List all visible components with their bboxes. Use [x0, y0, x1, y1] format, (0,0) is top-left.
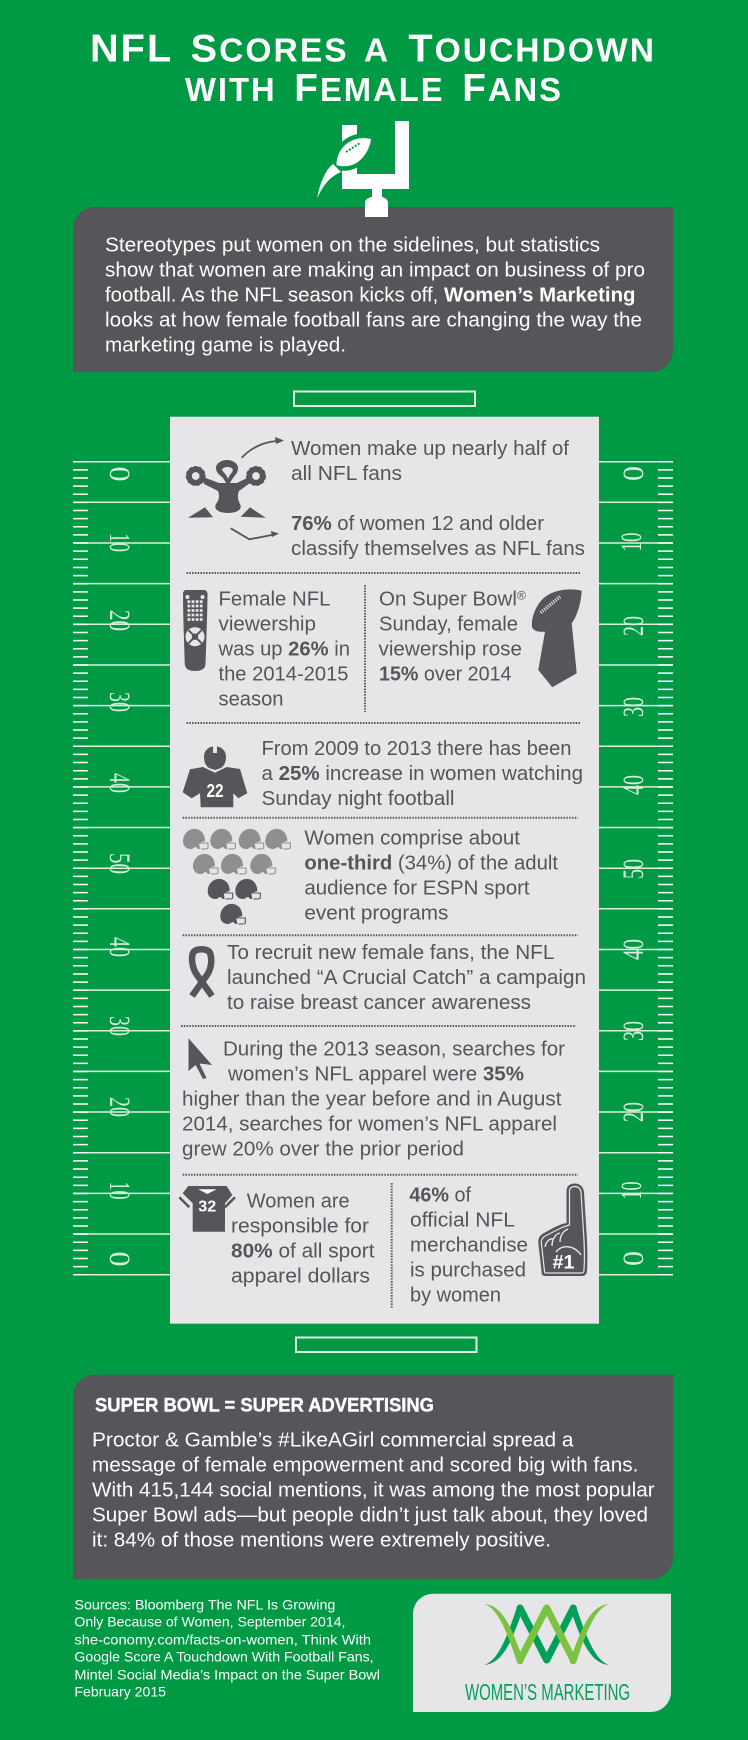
logo wordmark: WOMEN’S MARKETING [465, 1679, 630, 1705]
icon: football player 22 [183, 746, 247, 807]
yard numbers: left: 30 [103, 1016, 136, 1036]
text block: viewership up 26 percent: was up 26% in [217, 639, 350, 661]
text block: sources: Sources: Bloomberg The NFL Is Growing [74, 1596, 335, 1612]
text block: Sunday night football: Sunday night football [262, 788, 454, 810]
icon: foam finger #1 [538, 1184, 587, 1276]
text block: LikeAGirl commercial: Super Bowl ads—but people didn’t just talk about, they loved [92, 1505, 648, 1527]
text block: intro: looks at how female football fans are changing the way the [105, 310, 642, 332]
text block: 46 percent merchandise: 46% of [409, 1185, 471, 1207]
text block: Crucial Catch: to raise breast cancer awareness [227, 992, 531, 1014]
dotted dividers [181, 573, 581, 1308]
text block: Super Bowl viewership: ® [517, 589, 526, 603]
panel: Women's Marketing logo [413, 1594, 671, 1712]
text block: viewership up 26 percent: Female NFL [218, 589, 330, 611]
yard numbers: left: 30 [103, 692, 136, 712]
heading: Super Bowl = Super Advertising: SUPER BOWL = SUPER ADVERTISING [95, 1395, 434, 1416]
yard numbers: right: 40 [617, 939, 650, 960]
yard numbers: right: 30 [617, 1021, 650, 1041]
text block: intro [105, 235, 645, 357]
text block: 46 percent merchandise [409, 1185, 528, 1307]
text block: viewership up 26 percent: season [218, 689, 284, 711]
text block: nearly half of fans: all NFL fans [291, 463, 402, 485]
text block: viewership up 26 percent: viewership [218, 614, 316, 636]
icon: awareness ribbon [192, 949, 212, 996]
text block: ESPN audience: one-third (34%) of the adult [304, 852, 558, 874]
text block: LikeAGirl commercial [92, 1430, 655, 1552]
text block: Crucial Catch: launched “A Crucial Catch” a campaign [227, 967, 586, 989]
yard numbers: right: 0 [617, 1251, 650, 1266]
text block: apparel searches: 2014, searches for women’s NFL apparel [182, 1114, 557, 1136]
text block: sources: Google Score A Touchdown With Football Fans, [74, 1649, 374, 1665]
text block: Sunday night football: a 25% increase in women watching [262, 763, 583, 785]
icon: goal post and football [317, 121, 409, 217]
yard numbers: left: 20 [103, 1097, 136, 1117]
text block: intro: Stereotypes put women on the sidelines, but statistics [105, 235, 600, 257]
icon: cheerleader with arrows [187, 437, 284, 539]
yard numbers: right: 0 [617, 466, 650, 481]
text block: sources: February 2015 [74, 1684, 166, 1700]
text block: Sunday night football [262, 738, 583, 810]
yard numbers: left: 10 [103, 1182, 136, 1200]
yard numbers: left [103, 466, 136, 1266]
text block: Crucial Catch [227, 942, 586, 1014]
text block: LikeAGirl commercial: it: 84% of those mentions were extremely positive. [92, 1530, 551, 1552]
icon: foam finger #1: #1 [552, 1252, 575, 1274]
text block: Super Bowl viewership: Sunday, female [379, 614, 518, 636]
text block: intro: marketing game is played. [105, 335, 346, 357]
text block: Crucial Catch: To recruit new female fans, the NFL [227, 942, 554, 964]
text block: sources: Mintel Social Media’s Impact on the Super Bowl [74, 1666, 380, 1682]
text block: apparel searches: higher than the year before and in August [182, 1089, 562, 1111]
title: NFL SCORES A TOUCHDOWN [90, 28, 656, 71]
text block: intro: football. As the NFL season kicks off, Women’s Marketing [105, 285, 636, 307]
yard numbers: right: 20 [617, 616, 650, 636]
text block: Super Bowl viewership: On Super Bowl [379, 589, 514, 611]
text block: 80 percent apparel dollars [231, 1191, 375, 1288]
yard numbers: left: 0 [103, 1252, 136, 1266]
panel: Super Bowl advertising [73, 1375, 673, 1579]
text block: apparel searches: During the 2013 season, searches for [223, 1039, 565, 1061]
text block: apparel searches: grew 20% over the prior period [182, 1139, 464, 1161]
text block: viewership up 26 percent: the 2014-2015 [218, 664, 348, 686]
text block: LikeAGirl commercial: Proctor & Gamble’s #LikeAGirl commercial spread a [92, 1430, 574, 1452]
text block: intro: show that women are making an impact on business of pro [105, 260, 645, 282]
title [90, 28, 656, 110]
end zone box: top [294, 392, 475, 406]
yard numbers: right: 30 [617, 697, 650, 717]
yard lines and hash marks [73, 461, 673, 1275]
text block: 76 percent [291, 513, 585, 560]
text block: 46 percent merchandise: official NFL [410, 1210, 515, 1232]
yard numbers: left: 0 [103, 466, 136, 482]
text block: 76 percent: 76% of women 12 and older [291, 513, 544, 535]
text block: 80 percent apparel dollars: responsible for [231, 1216, 369, 1238]
icon: helmets one-third chart [183, 829, 290, 924]
icon: jersey 32: 32 [198, 1199, 216, 1216]
icon: football player 22: 22 [206, 781, 224, 801]
text block: 46 percent merchandise: by women [410, 1285, 501, 1307]
yard numbers: right: 10 [615, 1182, 648, 1200]
icon: trophy [532, 589, 582, 687]
icon: remote control [183, 590, 208, 671]
icon: jersey 32 [179, 1186, 235, 1232]
yard numbers: right: 50 [617, 859, 650, 879]
text block: Super Bowl viewership [378, 589, 526, 686]
yard numbers: right: 20 [617, 1102, 650, 1122]
text block: LikeAGirl commercial: With 415,144 social mentions, it was among the most popular [92, 1480, 655, 1502]
yard numbers: left: 20 [103, 610, 136, 631]
text block: 46 percent merchandise: merchandise [410, 1235, 528, 1257]
text block: ESPN audience: audience for ESPN sport [304, 877, 530, 899]
text block: 80 percent apparel dollars: 80% of all sport [231, 1241, 375, 1263]
text block: sources: she-conomy.com/facts-on-women, Think With [74, 1631, 371, 1647]
yard numbers: left: 10 [103, 533, 136, 552]
title: WITH FEMALE FANS [185, 67, 563, 110]
text block: nearly half of fans [291, 438, 569, 485]
text block: apparel searches: women’s NFL apparel were 35% [227, 1064, 524, 1086]
text block: Sunday night football: From 2009 to 2013 there has been [262, 738, 572, 760]
text block: ESPN audience [304, 827, 558, 924]
text block: sources [74, 1596, 380, 1700]
text block: sources: Only Because of Women, September 2014, [74, 1614, 345, 1630]
panel: statistics [170, 417, 599, 1324]
text block: 46 percent merchandise: is purchased [410, 1260, 526, 1282]
yard numbers: right: 10 [615, 532, 648, 552]
yard numbers: left: 40 [103, 937, 136, 957]
text block: ESPN audience: event programs [304, 902, 448, 924]
text block: 80 percent apparel dollars: Women are [247, 1191, 350, 1213]
text block: LikeAGirl commercial: message of female empowerment and scored big with fans. [92, 1455, 638, 1477]
yard numbers: right: 40 [617, 775, 650, 795]
text block: apparel searches [182, 1039, 565, 1161]
text block: 76 percent: classify themselves as NFL fans [291, 538, 585, 560]
yard numbers: left: 50 [103, 853, 136, 874]
text block: Super Bowl viewership: 15% over 2014 [379, 664, 512, 686]
icon: logo wave mark [484, 1604, 609, 1665]
text block: 80 percent apparel dollars: apparel dollars [231, 1266, 370, 1288]
icon: mouse cursor [188, 1038, 212, 1079]
text block: viewership up 26 percent [217, 589, 350, 711]
end zone box: bottom [296, 1338, 476, 1352]
yard numbers: right [615, 466, 650, 1266]
text block: Super Bowl viewership: viewership rose [378, 639, 522, 661]
text block: nearly half of fans: Women make up nearly half of [291, 438, 569, 460]
text block: ESPN audience: Women comprise about [304, 827, 520, 849]
yard numbers: left: 40 [103, 773, 136, 793]
panel: intro [73, 207, 673, 372]
